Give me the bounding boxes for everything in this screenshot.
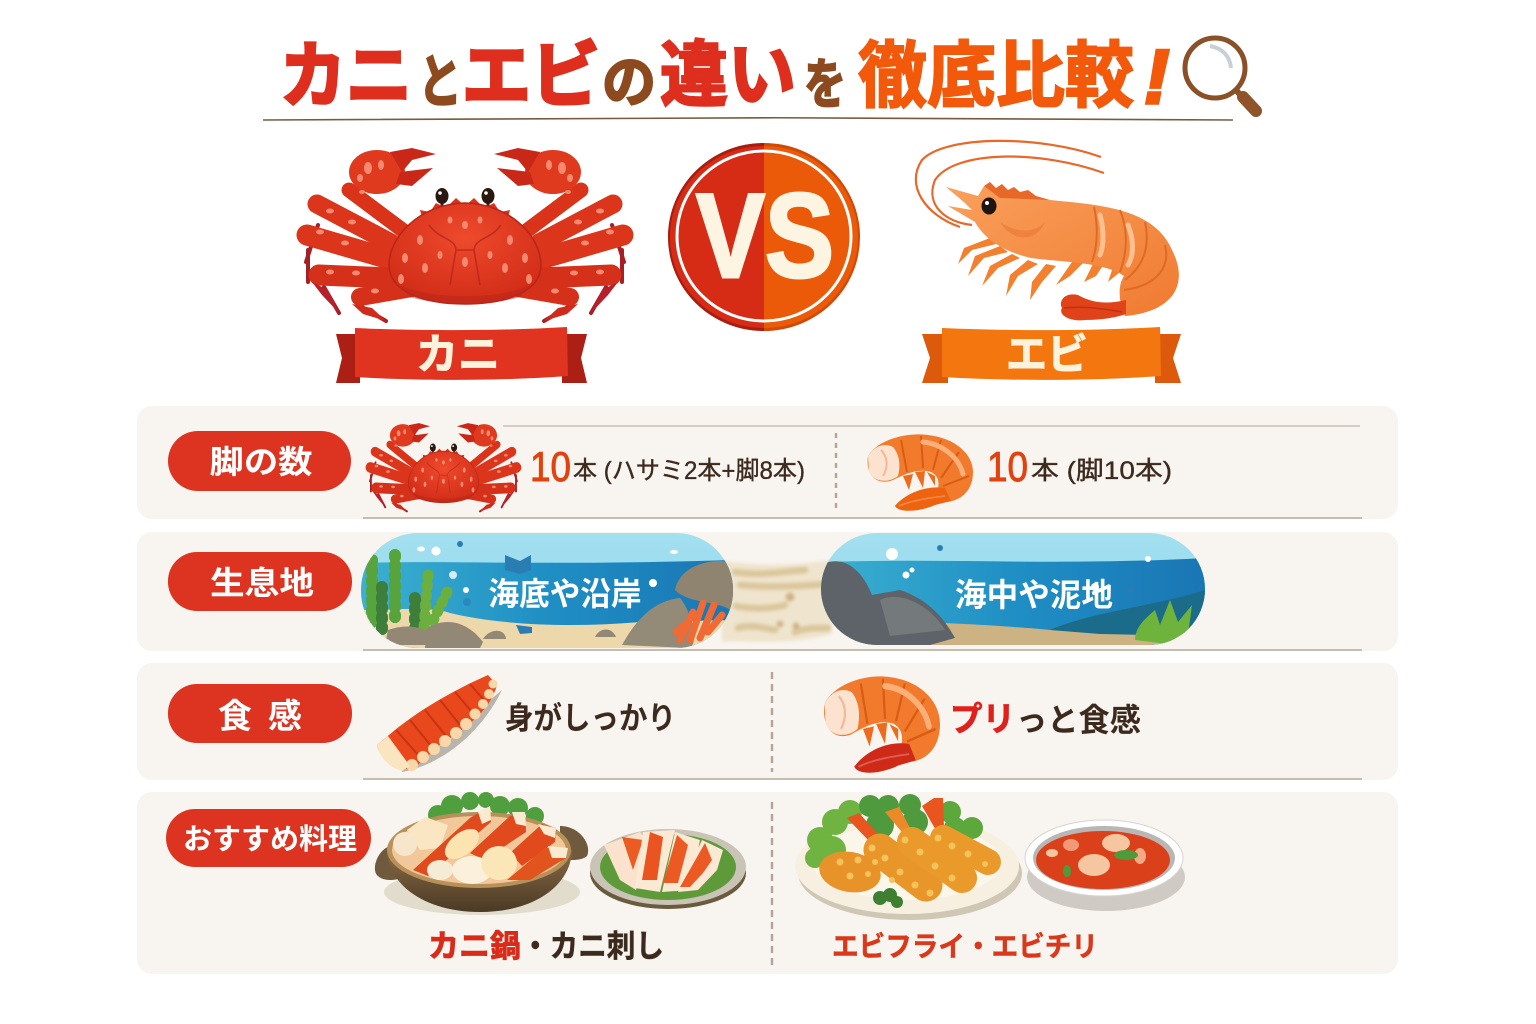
title: エビ bbox=[462, 37, 600, 117]
panel: おすすめ料理 bbox=[137, 792, 1398, 974]
text: crab dishes: カニ鍋 bbox=[428, 929, 521, 964]
dish: crab hot pot bbox=[375, 792, 588, 915]
ribbon: カニ: カニ bbox=[416, 331, 500, 378]
panel: 食感 bbox=[137, 663, 1398, 780]
panel: 脚の数 bbox=[137, 406, 1398, 519]
dish: crab sashimi bbox=[590, 829, 746, 909]
text: shrimp legs bbox=[987, 443, 1172, 490]
habitat: crab: 海底や沿岸 bbox=[488, 576, 642, 612]
label: 食感 bbox=[168, 684, 352, 743]
title bbox=[280, 35, 1169, 120]
icon: magnifying glass bbox=[1185, 38, 1256, 111]
icon: cooked shrimp bbox=[824, 676, 940, 773]
dish: fried shrimp bbox=[795, 794, 1022, 920]
title: の bbox=[602, 51, 656, 114]
text: crab texture: 身がしっかり bbox=[505, 701, 676, 736]
title underline bbox=[263, 118, 1233, 120]
label: 脚の数: 脚の数 bbox=[210, 444, 312, 480]
habitat: shrimp: 海中や泥地 bbox=[955, 577, 1113, 613]
label: 生息地 bbox=[168, 552, 352, 611]
text: shrimp texture: プリ bbox=[950, 701, 1015, 739]
ribbon: カニ bbox=[336, 327, 587, 383]
title: ! bbox=[1144, 35, 1169, 120]
habitat: shrimp bbox=[821, 533, 1205, 645]
text: crab legs bbox=[530, 443, 805, 490]
label: おすすめ料理 bbox=[166, 809, 371, 867]
icon: crab meat bbox=[377, 675, 502, 772]
title: と bbox=[418, 50, 462, 115]
text: crab legs: 本 (ハサミ2本+脚8本) bbox=[573, 457, 805, 485]
icon: small shrimp bbox=[868, 434, 973, 511]
ribbon: エビ bbox=[922, 327, 1181, 383]
ribbon: エビ: エビ bbox=[1006, 331, 1088, 378]
title: 徹底比較 bbox=[858, 37, 1134, 117]
text: shrimp texture: っと食感 bbox=[1016, 702, 1141, 738]
text: shrimp texture bbox=[950, 701, 1141, 739]
sand between habitats bbox=[722, 560, 832, 642]
text: crab dishes: ・カニ刺し bbox=[521, 929, 664, 964]
title: 違い bbox=[660, 36, 796, 116]
text: shrimp dishes: エビフライ・エビチリ bbox=[832, 931, 1098, 962]
label: 脚の数 bbox=[168, 431, 351, 491]
illustration: shrimp bbox=[916, 141, 1179, 320]
VS badge: VS bbox=[696, 169, 834, 303]
icon: small crab bbox=[370, 423, 517, 511]
title: を bbox=[804, 55, 846, 115]
text: crab dishes bbox=[428, 929, 664, 964]
text: crab legs: 10 bbox=[530, 443, 571, 490]
title: カニ bbox=[280, 37, 412, 117]
text: shrimp legs: 本 (脚10本) bbox=[1031, 457, 1172, 485]
text: shrimp legs: 10 bbox=[987, 443, 1028, 490]
label: おすすめ料理: おすすめ料理 bbox=[183, 823, 357, 856]
habitat: crab bbox=[361, 533, 733, 648]
dish: shrimp chili bbox=[1025, 820, 1185, 911]
label: 食感: 食感 bbox=[218, 698, 302, 736]
VS badge bbox=[668, 143, 860, 331]
label: 生息地: 生息地 bbox=[210, 565, 314, 601]
panel: 生息地 bbox=[137, 532, 1398, 651]
illustration: crab bbox=[306, 148, 624, 321]
